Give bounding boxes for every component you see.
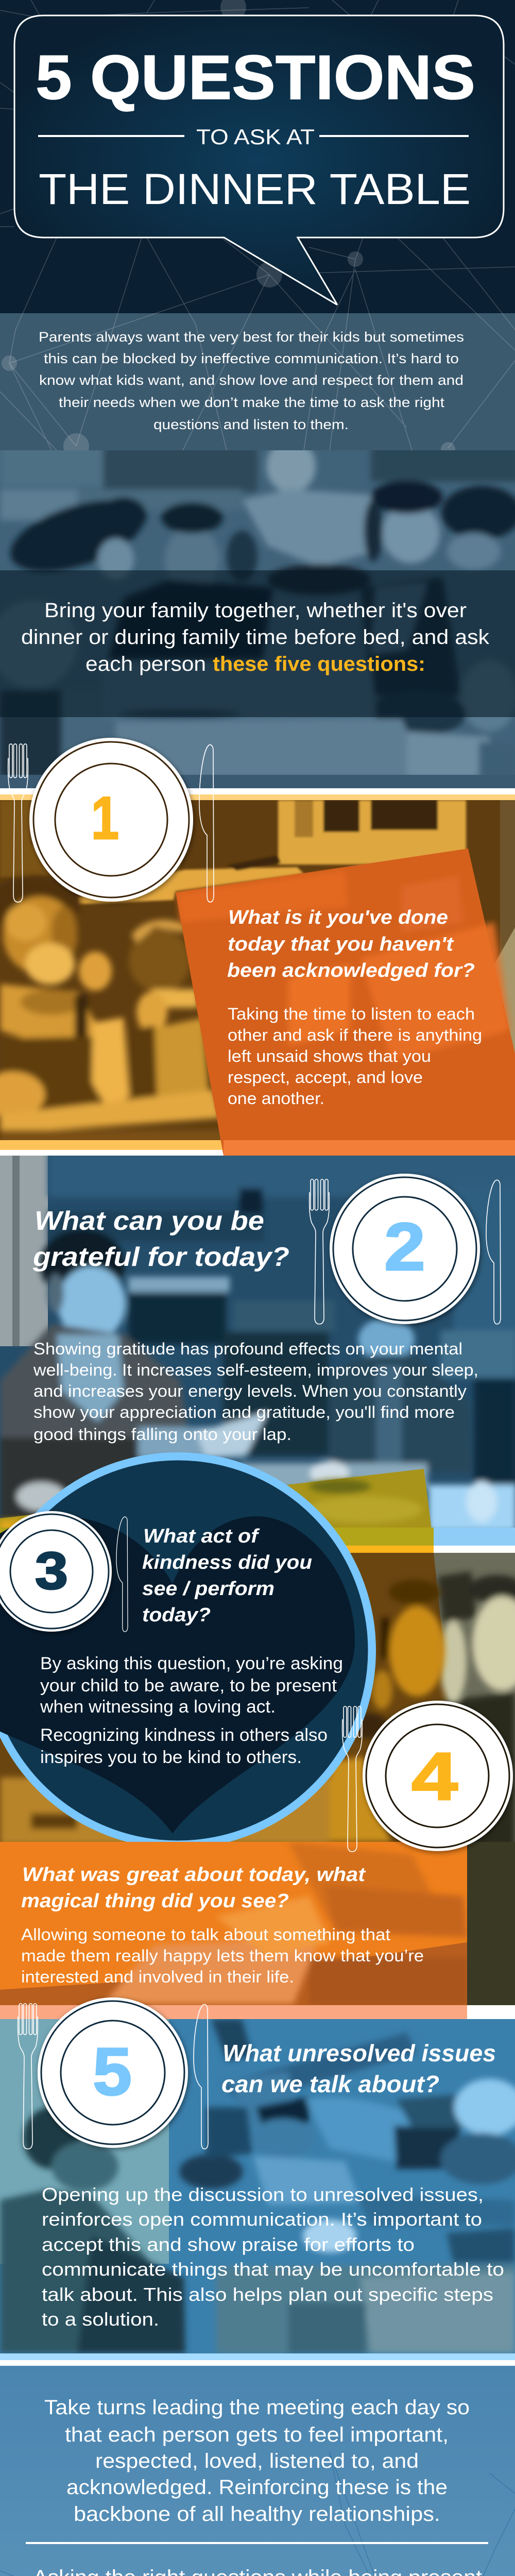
- question 2 heading: grateful for today?: [32, 1242, 289, 1272]
- photo: father and son at table (blue duotone): [0, 1150, 515, 1531]
- question 5 body: Opening up the discussion to unresolved issues,: [42, 2184, 484, 2205]
- question 1 heading: [227, 907, 475, 981]
- question 3 body: when witnessing a loving act.: [40, 1697, 276, 1717]
- question 2 body: show your appreciation and gratitude, you'll find more: [33, 1403, 455, 1421]
- panel: question 1 orange: [176, 849, 515, 1156]
- question 3 body: inspires you to be kind to others.: [40, 1748, 302, 1767]
- question 3 body: your child to be aware, to be present: [40, 1676, 337, 1696]
- panel: question 3 circle with heart: [0, 1452, 376, 1849]
- intro text: know what kids want, and show love and respect for them and: [39, 372, 464, 388]
- question 2 heading: [32, 1206, 289, 1272]
- question 2 body: Showing gratitude has profound effects on your mental: [33, 1340, 462, 1358]
- olive table overlay and stripes: [0, 1469, 515, 1553]
- icon: knife: [194, 2004, 208, 2149]
- question 4 body: Allowing someone to talk about something that: [21, 1925, 390, 1944]
- question 2 body: well-being. It increases self-esteem, improves your sleep,: [33, 1361, 478, 1379]
- question 5 heading: [221, 2040, 496, 2097]
- number 3: 3: [35, 1541, 68, 1600]
- subtitle with rules: TO ASK AT: [196, 125, 315, 149]
- question 2 body: and increases your energy levels. When you constantly: [33, 1382, 467, 1400]
- closing text: [26, 2396, 488, 2576]
- icon: knife: [199, 745, 214, 902]
- question 3 body: Recognizing kindness in others also: [40, 1725, 328, 1745]
- lead-in text: dinner or during family time before bed, and ask: [21, 626, 490, 649]
- question 1 body: left unsaid shows that you: [228, 1047, 431, 1065]
- intro band background: [0, 313, 515, 450]
- photo: woman and child with cups (orange duotone): [0, 800, 515, 1145]
- intro text: this can be blocked by ineffective communication. It’s hard to: [44, 351, 459, 366]
- background: closing network: [0, 2366, 515, 2576]
- intro text: Parents always want the very best for their kids but sometimes: [39, 329, 464, 345]
- section 5 text: [42, 2040, 504, 2330]
- question 4 body: [21, 1925, 424, 1986]
- question 4 body: interested and involved in their life.: [21, 1968, 294, 1986]
- icon: fork: [18, 2004, 38, 2149]
- question 5 heading: What unresolved issues: [222, 2040, 496, 2066]
- question 5 body: talk about. This also helps plan out specific steps: [42, 2284, 493, 2305]
- question 2 heading: What can you be: [35, 1206, 264, 1236]
- question 1 body: [228, 1005, 482, 1108]
- icon: fork: [342, 1706, 362, 1852]
- number 4: 4: [411, 1738, 458, 1814]
- question 5 heading: can we talk about?: [221, 2071, 439, 2097]
- icon: fork: [310, 1179, 329, 1324]
- number 5: 5: [93, 2033, 132, 2109]
- question 1 body: one another.: [228, 1089, 324, 1108]
- question 4 heading: [21, 1864, 366, 1912]
- lead-in text: Bring your family together, whether it's over: [44, 599, 467, 622]
- stripes under intro photo: [0, 775, 515, 800]
- closing paragraph 1: [44, 2396, 470, 2526]
- question 3 heading: What act of: [143, 1526, 260, 1547]
- closing paragraph 1: acknowledged. Reinforcing these is the: [66, 2476, 448, 2499]
- closing paragraph 1: that each person gets to feel important,: [65, 2424, 449, 2446]
- title speech bubble: [14, 15, 504, 304]
- plate 2 with cutlery: [310, 1174, 501, 1324]
- intro text: [39, 329, 464, 432]
- stripes under section 4: [0, 2005, 515, 2019]
- intro text: questions and listen to them.: [153, 417, 349, 432]
- question 1 body: other and ask if there is anything: [228, 1026, 482, 1044]
- question 1 heading: today that you haven't: [228, 934, 454, 955]
- question 5 body: communicate things that may be uncomfortable to: [42, 2259, 504, 2280]
- question 1 heading: What is it you've done: [228, 907, 448, 928]
- question 3 heading: kindness did you: [142, 1552, 312, 1573]
- plate 4 with fork: [342, 1701, 513, 1852]
- question 4 body: made them really happy lets them know that you’re: [21, 1946, 424, 1965]
- question 3 heading: [142, 1526, 312, 1626]
- lead-in text: [21, 599, 490, 675]
- question 1 body: Taking the time to listen to each: [228, 1005, 475, 1023]
- question 4 heading: magical thing did you see?: [21, 1890, 289, 1912]
- photo: picnic on the beach (blue and teal): [0, 2019, 515, 2353]
- background: header network: [0, 0, 515, 459]
- question 5 body: to a solution.: [42, 2309, 159, 2330]
- question 5 body: accept this and show praise for efforts to: [42, 2234, 415, 2255]
- question 2 body: [33, 1340, 478, 1444]
- intro text: their needs when we don’t make the time to ask the right: [59, 395, 445, 410]
- closing paragraph 1: backbone of all healthy relationships.: [74, 2503, 440, 2526]
- question 3 body: [40, 1654, 343, 1767]
- title line 1: 5 QUESTIONS: [36, 42, 475, 112]
- question 3 heading: see / perform: [142, 1578, 274, 1600]
- panel: question 4 orange: [0, 1842, 515, 2005]
- icon: knife: [116, 1517, 128, 1632]
- subtitle with rules: [38, 125, 469, 149]
- plate 1 with cutlery: [8, 738, 214, 902]
- photo: family at outdoor table (blue duotone): [0, 439, 515, 778]
- title line 3: THE DINNER TABLE: [39, 165, 471, 213]
- plate 5 with cutlery: [18, 1997, 208, 2149]
- closing paragraph 1: respected, loved, listened to, and: [95, 2450, 419, 2472]
- section 2 text: [32, 1206, 478, 1444]
- lead-in text: each person: [85, 653, 206, 675]
- number 2: 2: [384, 1209, 425, 1284]
- question 3 heading: today?: [142, 1604, 211, 1626]
- stripes under section 5: [0, 2353, 515, 2366]
- question 4 heading: What was great about today, what: [22, 1864, 366, 1886]
- icon: knife: [486, 1180, 501, 1324]
- photo: couple smiling (orange and sepia): [0, 1553, 515, 1855]
- question 1 body: respect, accept, and love: [228, 1068, 423, 1087]
- dark text band overlay: [0, 570, 515, 717]
- question 3 body: By asking this question, you’re asking: [40, 1654, 343, 1673]
- number 1: 1: [91, 784, 119, 852]
- closing paragraph 1: Take turns leading the meeting each day so: [44, 2396, 470, 2419]
- plate 3 with knife: [0, 1511, 128, 1632]
- icon: heart: [0, 1516, 355, 1834]
- stripes under section 1: [0, 1140, 515, 1156]
- icon: fork: [8, 744, 28, 902]
- question 1 heading: been acknowledged for?: [227, 960, 475, 981]
- question 5 body: [42, 2184, 504, 2330]
- lead-in text: these five questions:: [213, 653, 425, 675]
- question 2 body: good things falling onto your lap.: [33, 1425, 291, 1444]
- question 5 body: reinforces open communication. It’s important to: [42, 2209, 482, 2230]
